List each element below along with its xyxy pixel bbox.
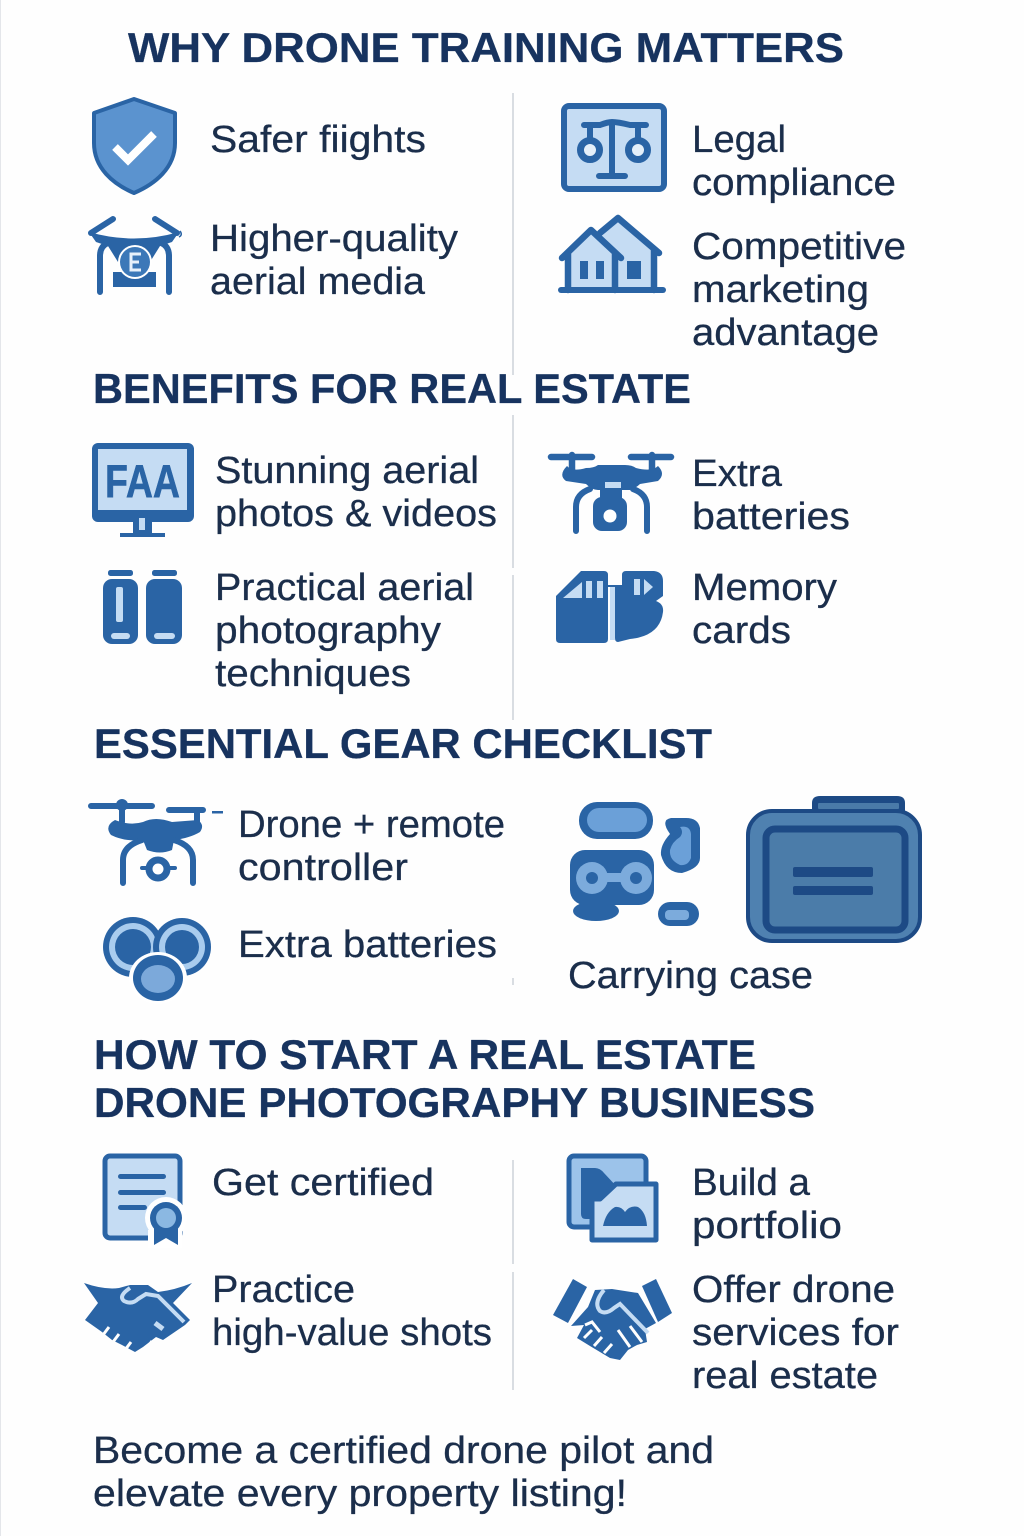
label: competitive marketing advantage: marketing: [692, 269, 869, 311]
label: practical aerial photography techniques: techniques: [215, 653, 411, 695]
icon: drone: [551, 455, 671, 531]
icon: portfolio folders: [569, 1156, 656, 1240]
label: legal compliance: compliance: [692, 162, 896, 204]
label: practical aerial photography techniques: photography: [215, 610, 441, 652]
label: legal compliance: Legal: [692, 119, 786, 161]
closing call to action: [93, 1430, 714, 1515]
icon: FAA monitor: [92, 443, 194, 537]
icon: drone with camera: [91, 799, 223, 883]
item: higher-quality aerial media: [89, 218, 458, 303]
item: extra batteries gear: [103, 917, 497, 1004]
item: offer drone services: [553, 1269, 899, 1397]
label: legal compliance: [692, 119, 896, 204]
item: memory cards: [556, 567, 837, 652]
label: higher-quality aerial media: Higher-quality: [210, 218, 458, 260]
label: stunning aerial photos: [215, 450, 497, 535]
icon: two batteries: [103, 570, 182, 644]
heading: how to start: [94, 1031, 815, 1126]
label: stunning aerial photos: Stunning aerial: [215, 450, 479, 492]
icon: shield with check: [94, 99, 175, 193]
panel: why drone training matters: [89, 24, 906, 354]
label: carrying case: Carrying case: [568, 955, 813, 997]
label: drone + remote controller: [238, 804, 505, 889]
label: build a portfolio: portfolio: [692, 1205, 842, 1247]
heading: how to start: DRONE PHOTOGRAPHY BUSINESS: [94, 1079, 815, 1126]
icon: handshake: [84, 1283, 192, 1352]
label: offer drone services: [692, 1269, 899, 1397]
label: drone + remote controller: Drone + remote: [238, 804, 505, 846]
item: practical aerial photography techniques: [103, 567, 474, 695]
closing call to action: Become a certified drone pilot and: [93, 1430, 714, 1472]
label: build a portfolio: Build a: [692, 1162, 811, 1204]
icon: carrying case: [748, 796, 920, 941]
label: stunning aerial photos: photos & videos: [215, 493, 497, 535]
label: drone + remote controller: controller: [238, 847, 408, 889]
label: build a portfolio: [692, 1162, 842, 1247]
label: competitive marketing advantage: advantage: [692, 312, 879, 354]
label: practical aerial photography techniques: Practical aerial: [215, 567, 474, 609]
icon: memory cards: [556, 571, 663, 643]
label: practice high-value shots: Practice: [212, 1269, 355, 1311]
icon: accessories: [570, 802, 700, 926]
label: get certified: Get certified: [212, 1162, 434, 1204]
label: extra batteries: [692, 453, 850, 538]
item: get certified: [105, 1156, 434, 1248]
item: safer flights: [94, 99, 426, 193]
heading: essential gear: ESSENTIAL GEAR CHECKLIST: [94, 720, 712, 767]
label: practice high-value shots: high-value shots: [212, 1312, 492, 1354]
item: practice high-value shots: [84, 1269, 492, 1354]
icon: houses: [561, 218, 663, 290]
label: higher-quality aerial media: aerial media: [210, 261, 426, 303]
panel: essential gear checklist: [91, 720, 920, 1004]
label: safer flights: Safer fiights: [210, 119, 426, 161]
label: extra batteries: Extra batteries: [238, 924, 497, 966]
item: extra batteries: [551, 453, 850, 538]
icon: round batteries: [103, 917, 211, 1004]
label: memory cards: [692, 567, 837, 652]
label: offer drone services: real estate: [692, 1355, 878, 1397]
label: extra batteries: Extra: [692, 453, 783, 495]
label: practical aerial photography techniques: [215, 567, 474, 695]
item: legal compliance: [564, 106, 896, 204]
heading: how to start: HOW TO START A REAL ESTATE: [94, 1031, 756, 1078]
panel: benefits for real estate: [92, 365, 850, 695]
label: practice high-value shots: [212, 1269, 492, 1354]
label: offer drone services: Offer drone: [692, 1269, 895, 1311]
closing call to action: elevate every property listing!: [93, 1473, 627, 1515]
label: memory cards: Memory: [692, 567, 837, 609]
label: extra batteries: batteries: [692, 496, 850, 538]
icon: FAA monitor: FAA: [105, 455, 180, 507]
item: carrying case: [568, 796, 920, 997]
icon: certificate: [105, 1156, 187, 1248]
title: WHY DRONE TRAINING MATTERS: [128, 24, 844, 71]
item: stunning aerial photos and videos: [92, 443, 497, 537]
heading: benefits: BENEFITS FOR REAL ESTATE: [93, 365, 691, 412]
icon: scales of justice: [564, 106, 664, 189]
label: competitive marketing advantage: Competitive: [692, 226, 906, 268]
panel: how to start a business: [84, 1031, 899, 1397]
icon: handshake with cuffs: [553, 1279, 672, 1360]
item: competitive marketing advantage: [561, 218, 906, 354]
label: competitive marketing advantage: [692, 226, 906, 354]
icon: drone with euro coin: [89, 219, 181, 292]
label: higher-quality aerial media: [210, 218, 458, 303]
item: drone and remote controller: [91, 799, 505, 889]
label: offer drone services: services for: [692, 1312, 899, 1354]
label: memory cards: cards: [692, 610, 791, 652]
item: build a portfolio: [569, 1156, 842, 1247]
